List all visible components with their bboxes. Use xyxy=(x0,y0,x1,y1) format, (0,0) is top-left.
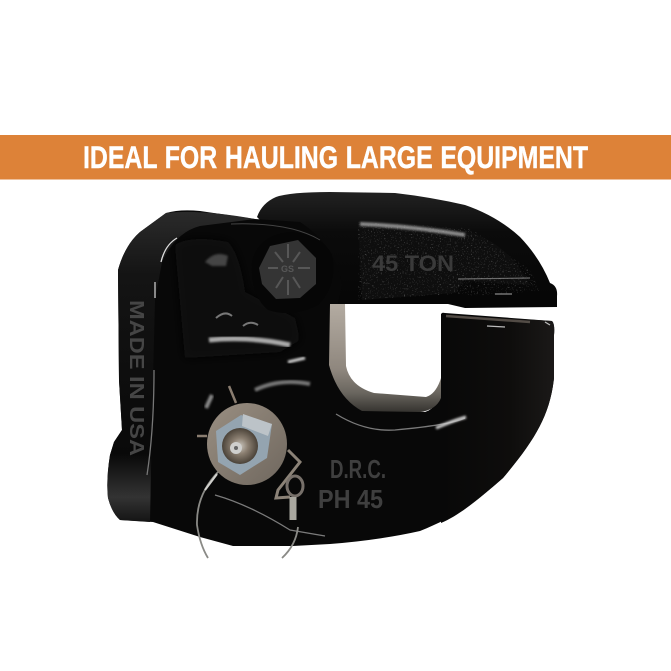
lower right jaw xyxy=(441,314,554,523)
nut, washer and pin xyxy=(197,386,287,485)
bolt head: GS xyxy=(281,264,294,274)
cast lettering: PH 45: PH 45 xyxy=(318,484,383,514)
infographic canvas xyxy=(0,135,671,559)
bolt head xyxy=(252,232,333,313)
pintle hook product xyxy=(107,192,557,558)
cotter spokes xyxy=(197,386,236,436)
orange banner xyxy=(0,135,671,180)
shine on casting panel xyxy=(360,224,465,235)
washer xyxy=(207,403,287,485)
left flange xyxy=(107,212,255,522)
cast lettering: 45 TON: 45 TON xyxy=(372,251,454,276)
main body casting xyxy=(107,210,554,546)
cast lettering: D.R.C.: D.R.C. xyxy=(330,454,386,484)
textured casting panel xyxy=(358,222,530,300)
steel lining of the hook opening xyxy=(329,304,441,412)
hex nut xyxy=(216,415,272,475)
safety clip and wire xyxy=(197,450,303,558)
edge highlights xyxy=(161,238,177,262)
cast lettering: MADE IN USA: MADE IN USA xyxy=(125,300,147,456)
upper hook latch xyxy=(257,192,558,308)
threaded pin xyxy=(222,428,258,464)
inner pocket xyxy=(175,239,300,358)
